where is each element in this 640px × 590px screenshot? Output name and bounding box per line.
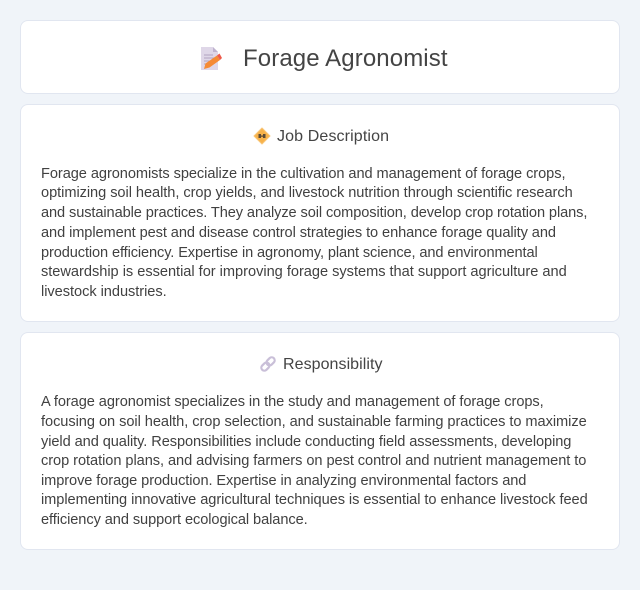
- text block: responsibility paragraph: [41, 394, 588, 528]
- text block: responsibility paragraph: efficiency and support ecological balance.: [41, 512, 308, 528]
- text block: responsibility paragraph: yield and quality. Responsibilities include conducting field assessments, developing: [41, 434, 571, 450]
- text block: job description paragraph: optimizing soil health, crop yields, and livestock nutrition through scientific research: [41, 185, 573, 201]
- text block: job description paragraph: production efficiency. Expertise in agronomy, plant science, and environmental: [41, 245, 538, 261]
- text block: job description paragraph: and sustainable practices. They analyze soil composition, develop crop rotation plans,: [41, 205, 587, 221]
- text block: responsibility paragraph: A forage agronomist specializes in the study and management of forage crops,: [41, 394, 544, 410]
- icon: orange diamond sign: [254, 128, 270, 144]
- panel: responsibility: [20, 332, 620, 550]
- text block: responsibility paragraph: improve forage production. Expertise in analyzing environmental factors and: [41, 473, 526, 489]
- panel: job description: [20, 104, 620, 322]
- text block: job description paragraph: and implement pest and disease control strategies to enhance forage quality and: [41, 225, 556, 241]
- text block: responsibility paragraph: implementing innovative agricultural techniques is essential to enhance livestock feed: [41, 492, 588, 508]
- text block: responsibility paragraph: crop rotation plans, and advising farmers on pest control and nutrient management to: [41, 453, 586, 469]
- icon: chain link: [260, 356, 276, 372]
- text block: responsibility paragraph: focusing on soil health, crop selection, and sustainable farming practices to maximize: [41, 414, 587, 430]
- text block: job description paragraph: livestock industries.: [41, 284, 167, 300]
- heading: Job Description: Job Description: [277, 128, 389, 145]
- heading: Forage Agronomist: Forage Agronomist: [243, 45, 448, 72]
- text block: job description paragraph: [41, 166, 587, 300]
- text block: job description paragraph: Forage agronomists specialize in the cultivation and management of forage crops,: [41, 166, 566, 182]
- icon: document with pencil: [201, 47, 222, 70]
- panel: title card: [20, 20, 620, 94]
- text block: job description paragraph: stewardship is essential for improving forage systems that support agriculture and: [41, 264, 567, 280]
- heading: Responsibility: Responsibility: [283, 356, 382, 373]
